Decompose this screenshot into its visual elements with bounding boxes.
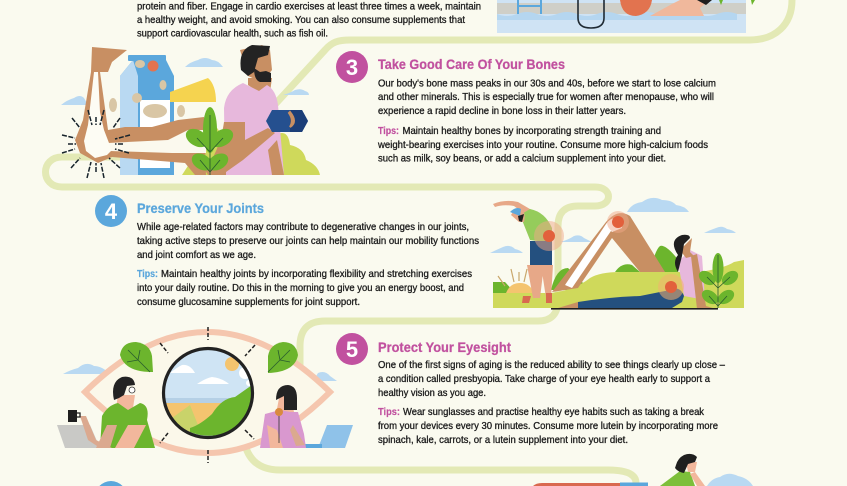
man	[205, 45, 284, 175]
illustration: swimming pool	[497, 0, 755, 33]
body text: While age-related factors may contribute to degenerative changes in our joints,	[137, 221, 469, 233]
text block: cardiovascular tips: a healthy weight, and avoid smoking. You can also consume supplements that	[137, 14, 465, 26]
woman stretching	[558, 235, 716, 309]
body text: taking active steps to preserve our joints can help maintain our mobility functions	[137, 235, 479, 247]
spinach leaves	[120, 342, 298, 373]
body text: healthy vision as you age.	[378, 387, 486, 399]
tips: Tips:	[378, 125, 399, 137]
tips: into your daily routine. Do this in the morning to give you an energy boost, and	[137, 282, 464, 294]
number badge 6	[99, 481, 123, 486]
eye outline	[85, 332, 330, 453]
hills behind	[182, 125, 250, 175]
dumbbell	[266, 110, 308, 132]
tips: spinach, kale, carrots, or a lutein supplement into your diet.	[378, 434, 628, 446]
cheese	[170, 78, 216, 102]
number badge 3: 3	[346, 55, 358, 80]
tips: consume glucosamine supplements for joint support.	[137, 296, 360, 308]
plant	[696, 253, 741, 308]
tips	[137, 268, 472, 308]
man stretching	[493, 201, 564, 303]
number badge 4	[95, 195, 127, 227]
woman at laptop	[260, 385, 353, 448]
tips: Maintain healthy bones by incorporating strength training and	[402, 125, 661, 137]
tips: Maintain healthy joints by incorporating flexibility and stretching exercises	[161, 268, 472, 280]
body text	[378, 78, 716, 117]
text block: cardiovascular tips: protein and fiber. Engage in cardio exercises at least three times a week, maintain	[137, 0, 481, 12]
leg bones figure	[552, 211, 665, 292]
body text: experience a rapid decline in bone loss in their latter years.	[378, 105, 626, 117]
tips: Tips:	[378, 406, 400, 418]
eyelash dashes	[160, 327, 255, 463]
body text: and other minerals. This is especially true for women after menopause, who will	[378, 91, 714, 103]
tips: weight-bearing exercises into your routine. Consume more high-calcium foods	[377, 139, 708, 151]
illustration: stretching and yoga	[490, 198, 744, 310]
clouds	[627, 198, 689, 212]
text block: cardiovascular tips	[137, 0, 481, 40]
heading: Take Good Care Of Your Bones	[378, 56, 565, 72]
clouds	[63, 364, 110, 374]
tips: such as milk, soy beans, or add a calcium supplement into your diet.	[378, 152, 666, 164]
floor line	[551, 308, 718, 310]
tips	[378, 406, 718, 446]
body text	[137, 221, 479, 261]
hills and ground	[650, 246, 680, 280]
heading: Preserve Your Joints	[137, 200, 264, 216]
body text: and joint comfort as we age.	[137, 249, 256, 261]
body text: Our body's bone mass peaks in our 30s and 40s, before we start to lose calcium	[378, 78, 716, 90]
milk carton	[109, 55, 185, 175]
illustration: eye with people	[57, 327, 353, 463]
clouds	[61, 96, 88, 105]
body text: One of the first signs of aging is the reduced ability to see things clearly up close –	[378, 359, 725, 371]
tips: Tips:	[137, 268, 158, 280]
number badge 4: 4	[105, 199, 118, 224]
plant	[183, 107, 236, 175]
body text	[378, 359, 725, 399]
arm with bones	[75, 47, 206, 175]
body text: a condition called presbyopia. Take charge of your eye health early to support a	[378, 373, 710, 385]
section 5: eyesight	[336, 333, 725, 446]
illustration: bottom figure	[533, 454, 753, 486]
man at laptop	[57, 377, 155, 448]
number badge 5: 5	[346, 337, 358, 362]
number badge 3	[336, 51, 368, 83]
lens with landscape	[164, 348, 252, 438]
tips: from your devices every 30 minutes. Consume more lutein by incorporating more	[378, 420, 718, 432]
number badge 5	[336, 333, 368, 365]
tips: Wear sunglasses and practise healthy eye habits such as taking a break	[403, 406, 705, 418]
section 4: joints	[95, 195, 479, 308]
elbow pain rays	[62, 110, 130, 178]
section 3: bones	[336, 51, 716, 164]
tips	[377, 125, 708, 164]
text block: cardiovascular tips: support cardiovascular health, such as fish oil.	[137, 28, 328, 40]
sun with rays	[498, 269, 540, 293]
illustration: bones, food and man with dumbbell	[61, 45, 320, 178]
heading: Protect Your Eyesight	[378, 339, 511, 355]
